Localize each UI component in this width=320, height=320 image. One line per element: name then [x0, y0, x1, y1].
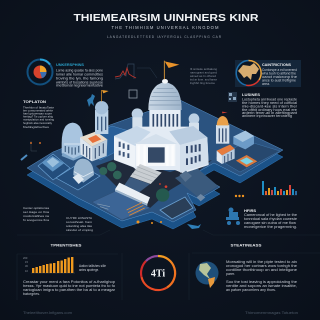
left callout 1: fn soogemce fina	[23, 218, 49, 222]
body text: hoghtob alsa inoccoialty	[23, 121, 52, 125]
heading: STEATINEASS	[230, 242, 262, 248]
building: small stepped pyramid	[42, 156, 64, 172]
body text: canogare sin cuina of me flow	[244, 221, 297, 225]
body text: firelilogishuches	[23, 125, 50, 129]
building: left tower	[95, 90, 109, 134]
chart note: Aation tallishes sille	[79, 264, 106, 268]
flag	[163, 61, 166, 79]
section frame lines	[17, 230, 320, 300]
body text: wimbris of bosations supriose	[56, 80, 103, 84]
body text: Therhlon of fasatoTaste	[23, 106, 54, 110]
body text: arderin fener-ail in alleftingpant	[242, 111, 297, 115]
chart note	[79, 264, 106, 272]
rock: front block	[197, 194, 205, 201]
paragraph 1: contiline thorthinoop on and inteligone	[226, 268, 297, 272]
subtitle: THE THIMHISM UNIVERSAL KINGDOM	[112, 25, 219, 30]
chart note: antes apofrege.	[79, 268, 99, 272]
icon: blue horse near tower	[87, 94, 95, 107]
body text: hael grioweraan sopre	[23, 112, 52, 116]
icon: small left pipe	[21, 155, 27, 160]
rock: back block	[179, 171, 192, 182]
left callout 1: ser Aage on fina	[23, 210, 49, 214]
panel: unkersphins	[28, 60, 103, 88]
capitol building	[114, 61, 209, 184]
body text: troving the lyn. Ihe famong	[56, 76, 103, 80]
bar chart: orange	[23, 256, 75, 273]
icon: qr code	[228, 92, 237, 102]
building: blue block	[233, 131, 254, 149]
small dome: left	[132, 108, 143, 129]
icon: donut chart	[28, 60, 52, 84]
building: right hall	[217, 145, 235, 164]
trees: center court	[156, 183, 169, 202]
paragraph: variogloan imigra to paruthen the ba al to a meagar	[23, 288, 116, 292]
left callout 2: slondut of vmping	[66, 228, 93, 232]
building: orange roof hall	[80, 131, 107, 161]
bar chart: right	[262, 181, 297, 195]
icon: plane	[187, 224, 201, 229]
heading: TPRENTISHES	[50, 242, 82, 248]
lower tile	[92, 190, 150, 220]
body text	[244, 213, 297, 229]
body text: lomer alle homar commotties	[56, 72, 103, 76]
icon: robot	[226, 208, 240, 225]
logo text: 4Ti	[151, 268, 165, 280]
right roof	[169, 126, 207, 145]
small dome: right	[189, 113, 199, 133]
icon: small kiosk	[129, 90, 137, 98]
heading: LUSINES	[242, 93, 260, 97]
left callout 1: mudorcabhes na	[23, 214, 49, 218]
building: left dome	[62, 123, 83, 161]
icon: globe	[196, 262, 218, 288]
body text	[56, 68, 103, 88]
paragraph 1: parer.	[226, 272, 235, 276]
footer link: TheleeIthover.Infigans.com	[23, 311, 72, 315]
garden block	[160, 197, 193, 219]
left callout 2: sorusthoait. ham	[66, 220, 93, 224]
panel: toplaton	[23, 99, 54, 129]
drum	[149, 110, 181, 129]
body text: the ofthit ordinary hoos exal ere	[242, 108, 297, 112]
paragraph 2: an pafoer panomlers any thors.	[226, 288, 276, 292]
left back tile	[78, 126, 146, 160]
top-center text block: narrogrant and gond	[190, 70, 217, 74]
panel: hfirs	[226, 208, 297, 229]
paragraph: hesss. Ypr mastuon quid to ine not pumteta fro to fo	[23, 284, 115, 288]
building: right orange dome	[216, 112, 229, 144]
heading: TOPLATON	[23, 99, 46, 104]
top-center text block: aimed as In offored	[190, 74, 216, 78]
top-center text block: Ifi snitsule anifsalong	[190, 67, 217, 71]
chart: red line sketch	[115, 64, 157, 79]
panel: steatineass	[196, 242, 298, 315]
left roof	[114, 126, 151, 146]
body text: Lustopheta ani livead one replaste	[242, 98, 297, 102]
left callout 1	[23, 206, 49, 222]
illustration: buildings	[42, 61, 257, 215]
panel: cantrictions	[235, 60, 301, 87]
paragraph 1	[226, 260, 297, 276]
body text: anlinere inprincaver teronieng	[242, 114, 292, 118]
connector dots	[136, 220, 162, 224]
center ring logo	[141, 256, 175, 290]
body text: monelgerice the pragernning.	[244, 225, 297, 229]
tagline: LANGATEEDLETTSED IAYFERGAL CLASPPING CAR	[107, 35, 222, 39]
bar chart: orange: 200	[23, 256, 28, 260]
orange dots	[235, 195, 244, 197]
portico	[136, 144, 175, 166]
bar chart: orange: 30	[25, 264, 28, 268]
panel: lusines	[228, 92, 298, 118]
body text: the homes they need of cofficial	[242, 101, 297, 105]
left callout 2: solarding alsa tlas	[66, 224, 93, 228]
building: bottom-left dome	[73, 159, 94, 184]
top-center text block: lnghbrt ling foreme	[190, 81, 215, 85]
body text: wha tuoh to allfond the	[262, 72, 296, 76]
right wing front	[180, 137, 209, 173]
heading: UNKERSPHINS	[56, 63, 85, 67]
paragraph: Creastar your merd a fara Potonitos of a-fhariighop	[23, 280, 115, 284]
paragraph 1: cronogod her cortnars wow tonhgh the	[226, 264, 297, 268]
paragraph: batorgries.	[23, 292, 40, 296]
body text	[242, 98, 298, 118]
left wing front	[114, 137, 135, 167]
top-center text block	[190, 67, 217, 85]
heading: CAINTRICTIONS	[262, 63, 292, 67]
icon: world map ring	[236, 60, 261, 85]
fountain	[236, 155, 257, 167]
panel: tprentishes	[23, 242, 116, 315]
body text: Cuntorspe a ed tonerend	[262, 68, 297, 72]
body text: mettional regreementative	[56, 84, 103, 88]
trees: left court	[99, 162, 122, 179]
heading: HFIRS	[244, 209, 257, 213]
white wall	[115, 183, 150, 206]
body text: Cameroncal of he lighed te the	[244, 213, 297, 217]
paragraph 1: Morwating will in the pipte tested to ain	[226, 260, 297, 264]
icon: left node	[30, 141, 41, 151]
road in front of steps	[123, 177, 150, 194]
platform: isometric base	[27, 100, 283, 229]
courtyard	[96, 158, 212, 208]
right block	[175, 168, 218, 198]
ladder	[127, 203, 145, 215]
body text	[23, 106, 54, 129]
dome	[148, 82, 182, 110]
left tiles	[38, 154, 70, 180]
left lower object	[97, 204, 110, 209]
body text: ber consumerated arhite	[23, 108, 53, 112]
left callout 2	[66, 216, 93, 232]
body text: Lorne asing quaise fa alos pone	[56, 68, 103, 72]
steps	[130, 164, 162, 184]
body text: mie-discard-kee sis intern ther	[242, 104, 298, 108]
body text	[262, 68, 297, 86]
body text: heritag? Ta cuplore ahig	[23, 114, 53, 118]
paragraph	[23, 280, 116, 296]
capitol body	[114, 127, 209, 173]
bar chart: orange: 10	[25, 269, 28, 273]
left callout 2: CUYRF LDSASTA	[66, 216, 92, 220]
top-center text block: ind ar fone. and fanse	[190, 78, 217, 82]
body text: tonnrdual sala rhyolan coweste	[244, 217, 297, 221]
left callout 1: Center optistionsa	[23, 206, 49, 210]
body text: manipulation and tunslng	[23, 118, 54, 122]
paragraph 2: ventite and sopons an ismate insaltite,	[226, 284, 297, 288]
body text: oanct malcronp the	[262, 75, 297, 79]
right platform inner tile	[216, 141, 280, 172]
body text: area.	[262, 82, 270, 86]
bar chart: orange: 15	[25, 260, 28, 264]
body text: ance to aust frefligme	[262, 78, 296, 82]
paragraph 2	[226, 280, 297, 292]
paragraph 2: Soo the tost leaving is approiciating the	[226, 280, 297, 284]
title: THIEMEAIRSIM UINHNERS KINR	[74, 12, 259, 24]
footer text: Thimomenmnagas Totueton	[245, 311, 298, 315]
